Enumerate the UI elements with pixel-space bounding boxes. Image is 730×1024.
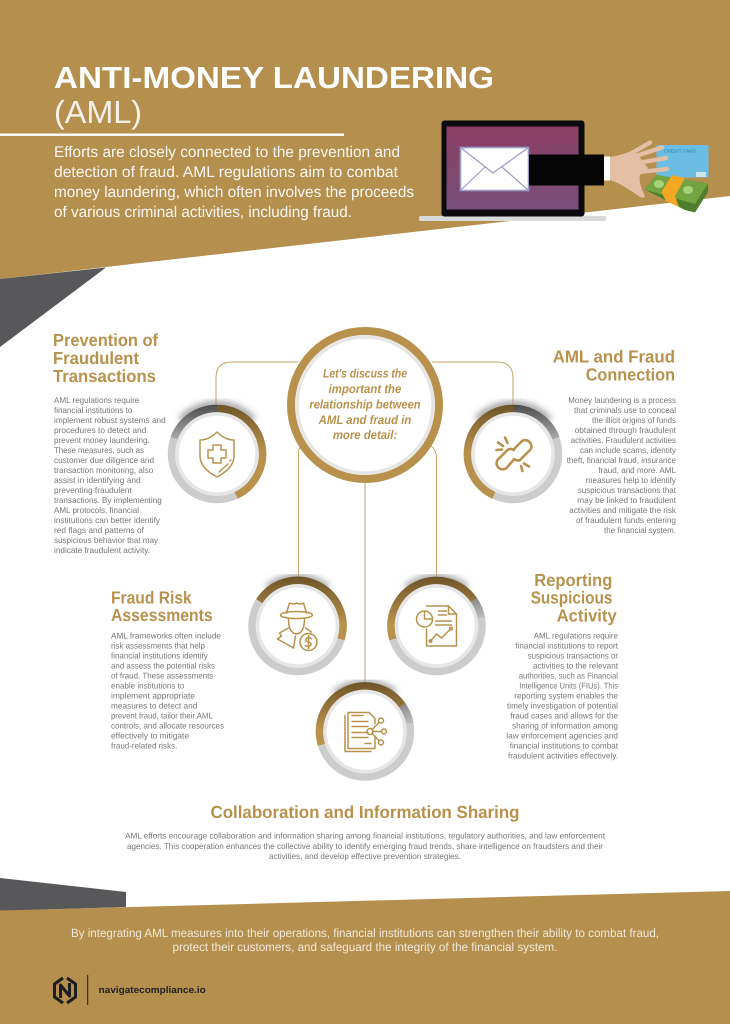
icon: broken chain [496,438,531,471]
body: connection: of fraudulent funds entering [576,515,676,525]
panel: AML and fraud connection [553,346,677,535]
background: bottom dark wedge [0,878,126,911]
body: connection: theft, financial fraud, insurance [567,455,676,465]
body: prevention: indicate fraudulent activity. [54,545,150,555]
icon: hexagon N mark [54,978,76,1003]
title: ANTI-MONEY LAUNDERING [54,61,494,95]
body: connection: activities. Fraudulent activities [571,435,676,445]
body: prevention: institutions can better identify [54,515,161,525]
body: reporting: activities to the relevant [533,660,619,670]
body: prevention: assist in identifying and [54,475,141,485]
heading: connection: Connection [586,364,675,384]
body: fraud risk: risk assessments that help [111,640,205,650]
panel: reporting suspicious activity [506,570,619,760]
body: fraud risk: and assess the potential risks [111,660,215,670]
body: reporting: authorities, such as Financial [519,670,618,680]
conclusion text: protect their customers, and safeguard the integrity of the financial system. [172,940,558,954]
logo: navigate compliance [54,975,206,1005]
body: prevention: customer due diligence and [54,455,154,465]
body: reporting: suspicious transactions or [528,650,618,660]
heading: prevention [53,330,158,386]
background: top gold banner [0,0,730,279]
background: bottom gold banner [0,891,730,1024]
central question text: Let's discuss the [323,366,407,380]
body: fraud risk: AML frameworks often include [111,630,221,640]
heading: prevention: Fraudulent [53,348,139,368]
body: collaboration: agencies. This cooperation enhances the collective ability to identify emerging fraud trends, share intelligence on fraudsters and their [127,841,603,851]
body: connection [567,395,677,535]
intro text: detection of fraud. AML regulations aim to combat [54,164,399,181]
heading: fraud risk: Assessments [111,605,213,625]
heading: collaboration: Collaboration and Information Sharing [210,802,520,822]
heading: reporting: Suspicious [531,588,613,608]
body: reporting: financial institutions to report [515,640,619,650]
body: fraud risk: enable institutions to [111,680,185,690]
intro text [54,144,414,221]
body: fraud risk: implement appropriate [111,690,195,700]
body: prevention: transactions. By implementing [54,495,162,505]
body: prevention: financial institutions to [54,405,133,415]
intro text: money laundering, which often involves the proceeds [54,184,414,201]
conclusion text [71,926,659,954]
body: prevention: prevent money laundering. [54,435,150,445]
heading: prevention: Transactions [53,366,156,386]
body: fraud risk: fraud-related risks. [111,740,177,750]
body: fraud risk: controls, and allocate resources [111,720,224,730]
icon: shield with cross [200,432,234,477]
heading: reporting [531,570,617,626]
body: fraud risk: prevent fraud, tailor their AML [111,710,213,720]
heading: reporting: Activity [557,606,617,626]
body: connection: the illicit origins of funds [592,415,676,425]
body: connection: Money laundering is a process [568,395,676,405]
ring: AML and fraud connection broken chain icon [467,405,558,500]
heading: prevention: Prevention of [53,330,158,350]
panel: fraud risk assessments [111,588,224,750]
icon: document with share nodes [345,712,386,752]
body: reporting: AML regulations require [534,630,618,640]
body: fraud risk: effectively to mitigate [111,730,189,740]
intro text: Efforts are closely connected to the prevention and [54,144,400,161]
body: fraud risk [111,630,224,750]
body: reporting: law enforcement agencies and [506,730,618,740]
body: reporting: fraudulent activities effectively. [508,750,618,760]
body: connection: may be linked to fraudulent [577,495,677,505]
background: top dark wedge [0,268,106,347]
body: connection: obtained through fraudulent [575,425,677,435]
body: prevention: procedures to detect and [54,425,147,435]
title underline [0,134,344,136]
body: connection: can include scams, identity [580,445,677,455]
logo divider [87,975,88,1005]
central question text: AML and fraud in [318,413,412,427]
body: prevention: These measures, such as [54,445,144,455]
body: fraud risk: measures to detect and [111,700,198,710]
ring: fraud risk spy icon [252,578,343,672]
body: prevention: preventing fraudulent [54,485,132,495]
body: connection: fraud, and more. AML [598,465,676,475]
heading: connection [553,346,675,384]
body: connection: suspicious transactions that [578,485,677,495]
central circle [291,331,439,479]
heading: connection: AML and Fraud [553,346,675,366]
central question text: important the [329,382,401,396]
intro text: of various criminal activities, including fraud. [54,204,352,221]
heading: reporting: Reporting [534,570,612,590]
body: reporting: fraud cases and allows for the [510,710,618,720]
body: collaboration: AML efforts encourage collaboration and information sharing among financial institutions, regulatory authorities, and law enforcement [125,831,606,841]
title: (AML) [54,94,142,130]
body: prevention: transaction monitoring, also [54,465,154,475]
body: collaboration [125,831,606,861]
central question text: more detail: [333,428,397,442]
panel: collaboration and information sharing [125,802,606,861]
body: reporting [506,630,619,760]
body: connection: activities and mitigate the risk [569,505,677,515]
icon: report with pie and line chart [416,606,456,646]
heading: fraud risk [111,588,213,625]
ring: prevention shield icon [172,405,263,500]
body: reporting: timely investigation of potential [507,700,618,710]
panel: prevention of fraudulent transactions [53,330,166,555]
body: fraud risk: of fraud. These assessments [111,670,213,680]
body: reporting: reporting system enables the [514,690,618,700]
body: prevention: implement robust systems and [54,415,166,425]
body: prevention: AML protocols, financial [54,505,139,515]
central question text [309,366,421,442]
connector lines [216,362,513,684]
body: collaboration: activities, and develop effective prevention strategies. [269,851,461,861]
body: prevention: red flags and patterns of [54,525,145,535]
body: connection: the financial system. [604,525,676,535]
icon: spy with dollar coin [278,603,317,650]
central question text: relationship between [309,398,421,412]
illustration: laptop with hand stealing card and cash: CREDIT CARD [664,148,696,154]
ring: collaboration document share icon [319,684,410,777]
body: connection: that criminals use to conceal [574,405,676,415]
heading: fraud risk: Fraud Risk [111,588,192,608]
body: connection: measures help to identify [586,475,677,485]
conclusion text: By integrating AML measures into their operations, financial institutions can strengthen their ability to combat fraud, [71,926,659,940]
logo website text: navigatecompliance.io [99,985,206,996]
body: prevention [54,395,166,555]
body: fraud risk: financial institutions identify [111,650,208,660]
body: prevention: suspicious behavior that may [54,535,159,545]
body: prevention: AML regulations require [54,395,140,405]
title [54,61,494,130]
ring: reporting chart icon [391,578,482,672]
body: reporting: sharing of information among [512,720,618,730]
body: reporting: financial institutions to combat [510,740,619,750]
body: reporting: Intelligence Units (FIUs). This [519,680,618,690]
illustration: laptop with hand stealing card and cash [419,120,708,221]
